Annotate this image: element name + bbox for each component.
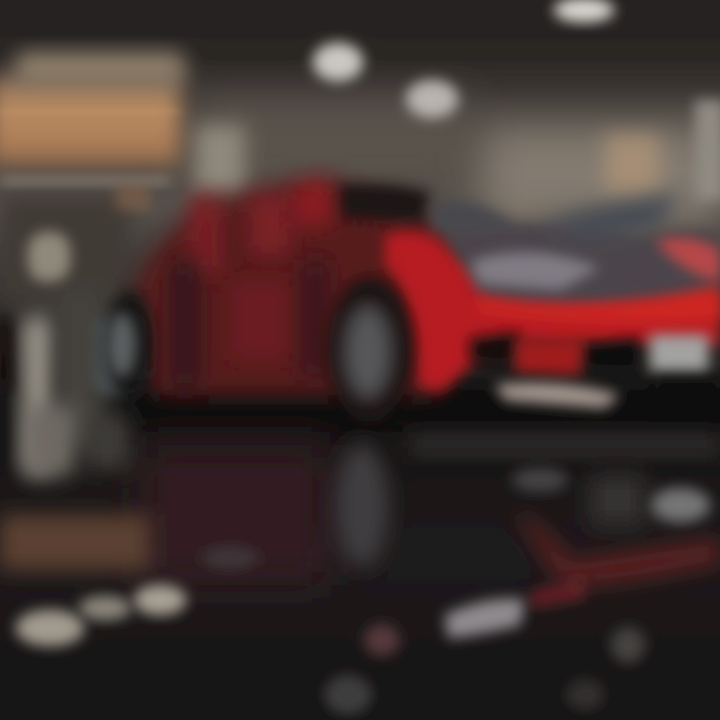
car: license plate (650, 335, 708, 371)
car: side window reflection (430, 201, 520, 245)
car: front splitter highlight (495, 383, 620, 408)
car: hood reflections (470, 252, 600, 290)
car: bright red front fender (385, 232, 720, 392)
background: ceiling and wall tones (0, 100, 720, 305)
car (106, 180, 720, 425)
ceiling lights (313, 0, 614, 118)
car: hood (450, 224, 720, 305)
car: dark window (335, 184, 430, 222)
car: far front wheel (655, 378, 720, 416)
car: rear wheel (106, 291, 154, 399)
people and objects on the left (0, 185, 150, 475)
car: shadow beneath (130, 385, 720, 425)
car: upper red roofline (290, 180, 332, 228)
car: rear and cabin body (135, 180, 470, 395)
car: front air intakes (470, 332, 520, 365)
car: door mottling (170, 195, 330, 390)
floor reflections (0, 405, 720, 715)
background: orange lit panel (0, 52, 185, 186)
car: red hood lip (475, 285, 720, 323)
car: front wheel (328, 278, 412, 422)
car: red bumper section (515, 340, 585, 375)
